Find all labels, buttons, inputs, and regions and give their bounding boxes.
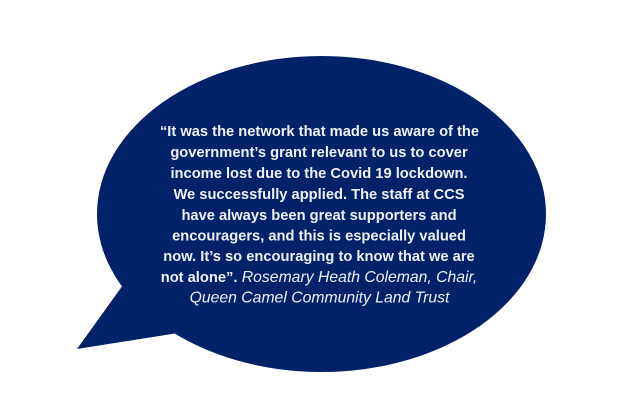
attribution organisation: Queen Camel Community Land Trust [190,290,450,306]
quote text: government’s grant relevant to us to cover [170,145,468,161]
bubble tail [77,285,178,349]
quote text [160,124,479,306]
quote text: “It was the network that made us aware of the [160,124,479,140]
speech bubble [77,56,546,372]
quote text: encouragers, and this is especially valued [172,228,466,244]
quote text: have always been great supporters and [181,208,457,224]
attribution line: not alone”. Rosemary Heath Coleman, Chair, [161,269,477,286]
bubble body [97,56,546,372]
quote text: We successfully applied. The staff at CCS [173,187,465,203]
quote text: income lost due to the Covid 19 lockdown. [170,166,468,182]
quote text: now. It’s so encouraging to know that we are [163,249,475,265]
